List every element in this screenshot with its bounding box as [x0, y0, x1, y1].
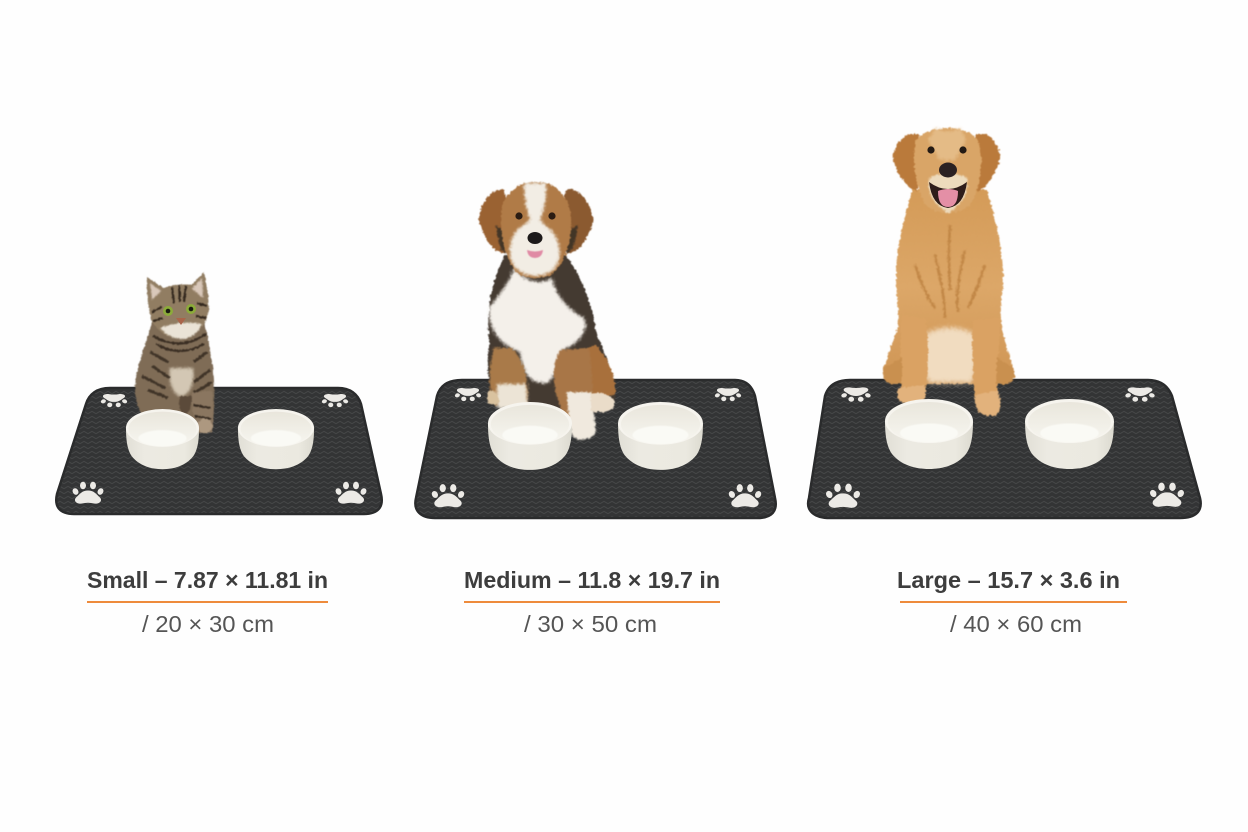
label: small: Small – 7.87 × 11.81 in — [87, 567, 328, 593]
bowl: medium right — [618, 402, 703, 470]
panel: medium size — [415, 182, 776, 637]
bowl: small right — [238, 409, 314, 469]
cat — [135, 272, 214, 434]
mat: large — [808, 380, 1201, 518]
mat: small — [56, 388, 382, 514]
mat: medium — [415, 380, 776, 518]
label: medium: Medium – 11.8 × 19.7 in — [464, 567, 720, 593]
label: medium — [464, 567, 720, 637]
panel: large size — [808, 128, 1201, 637]
dog: large — [883, 128, 1015, 416]
label: small: / 20 × 30 cm — [142, 611, 274, 637]
panel: small size — [56, 272, 382, 637]
bowl: large right — [1025, 399, 1114, 469]
bowl: large left — [885, 399, 973, 469]
dog: medium — [479, 182, 615, 440]
bowl: small left — [126, 409, 199, 469]
label: medium: / 30 × 50 cm — [524, 611, 657, 637]
label: small — [87, 567, 328, 637]
label: large: / 40 × 60 cm — [950, 611, 1082, 637]
label: large — [897, 567, 1127, 637]
bowl: medium left — [488, 402, 572, 470]
label: large: Large – 15.7 × 3.6 in — [897, 567, 1120, 593]
